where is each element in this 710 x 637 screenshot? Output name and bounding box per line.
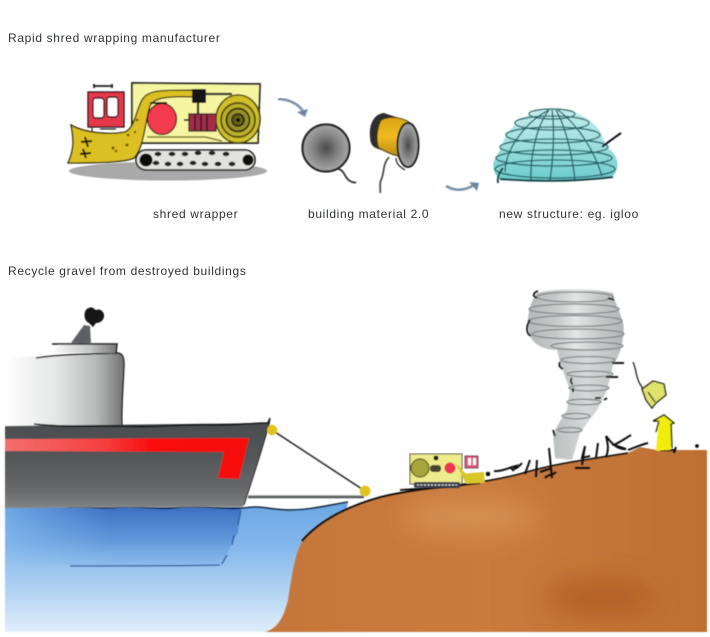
tornado — [527, 289, 624, 460]
flying house roof — [633, 362, 666, 408]
cabin — [88, 92, 124, 127]
remaining house — [653, 415, 674, 451]
mooring lines — [248, 425, 370, 497]
bucket and conveyor — [68, 90, 195, 163]
tracks — [136, 150, 255, 170]
hull — [5, 423, 270, 508]
radar — [71, 325, 91, 344]
caption: new structure: new structure: eg. igloo — [499, 207, 639, 221]
wrap coil — [216, 95, 260, 143]
heading: recycle gravel: Recycle gravel from destroyed buildings — [8, 264, 247, 278]
caption: building material 2.0: building material 2.0 — [308, 207, 429, 221]
bucket teeth — [80, 137, 92, 158]
submerged hull — [5, 507, 241, 565]
scene: land — [260, 440, 710, 635]
caption: shred wrapper: shred wrapper — [153, 207, 238, 221]
arrow: to building material — [278, 99, 308, 117]
motor — [192, 89, 206, 103]
funnel — [5, 353, 123, 426]
small shred wrapper on land — [410, 454, 485, 488]
illustration: shred wrapper machine — [68, 83, 267, 180]
buoys — [267, 425, 277, 435]
rubble — [487, 435, 698, 478]
icon: igloo dome — [493, 108, 621, 183]
red tank — [148, 104, 176, 134]
red stripe — [5, 438, 249, 479]
scene: water — [5, 501, 348, 632]
heading: rapid shred wrapping manufacturer: Rapid shred wrapping manufacturer — [8, 31, 221, 45]
icon: wrapped spool — [370, 113, 418, 193]
scene: ship — [5, 307, 270, 508]
icon: flat disc — [302, 124, 356, 183]
ground shadow — [69, 162, 267, 180]
machine body — [132, 83, 260, 143]
arrow: to new structure — [446, 182, 479, 191]
